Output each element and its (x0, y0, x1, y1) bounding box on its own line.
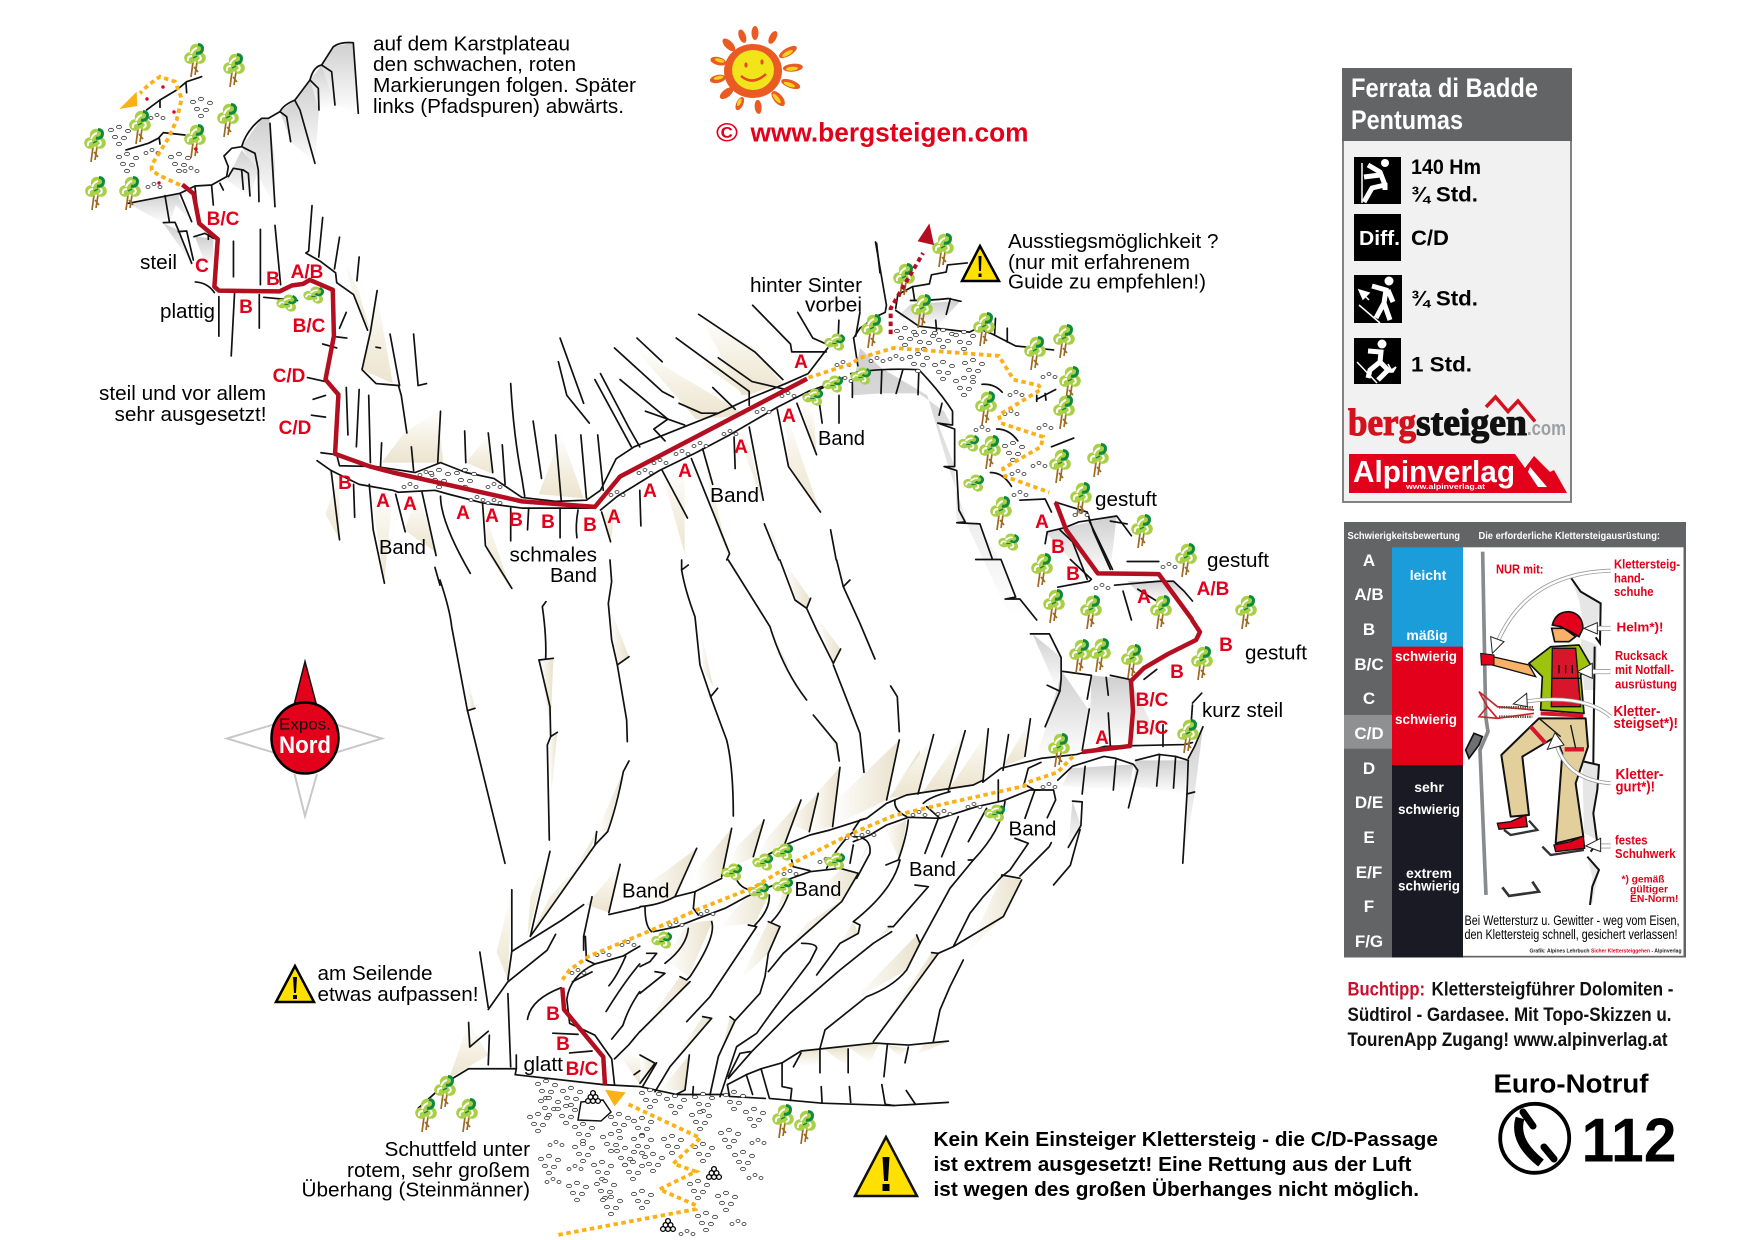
rock line drawing: central wall (440, 560, 899, 863)
difficulty colour bands: schwierig (1398, 801, 1460, 817)
equipment labels: mit Notfall- (1615, 662, 1674, 677)
map labels: gestuft (1095, 489, 1157, 511)
grade scale: B/C (1354, 655, 1384, 674)
text: book tip: Buchtipp: (1348, 980, 1425, 1000)
route difficulty grades: A (782, 406, 796, 427)
route difficulty grades: B (509, 510, 523, 531)
route difficulty grades: A/B (291, 262, 323, 283)
route difficulty grades: B (1066, 564, 1080, 585)
route difficulty grades: A/B (1197, 579, 1229, 600)
map labels: steil und vor allem (99, 383, 266, 405)
map labels: Band (794, 879, 842, 901)
callout: exit possibility: (nur mit erfahrenem (1008, 252, 1190, 274)
map labels: plattig (160, 301, 215, 323)
route difficulty grades: A (456, 503, 470, 524)
map labels: Band (818, 428, 865, 450)
text: ascent values: 140 Hm (1411, 156, 1481, 179)
icon and value: approach time: ¾ Std. (1411, 288, 1478, 310)
compass: exposure north: Nord (279, 732, 331, 759)
equipment labels: ausrüstung (1615, 676, 1677, 692)
rock line drawing: summit spires and karst plateau (126, 42, 358, 263)
route difficulty grades: B (1170, 662, 1184, 683)
difficulty colour bands: extrem (1406, 865, 1452, 881)
text: book tip (1348, 980, 1674, 1051)
map labels: Band (622, 880, 670, 902)
grade scale: A (1363, 551, 1375, 570)
safety note (1464, 913, 1680, 942)
icon and value: difficulty (1354, 214, 1449, 261)
shading: rock faces (128, 43, 1203, 1095)
route difficulty grades: A (1035, 512, 1049, 533)
map labels: Band (379, 537, 426, 559)
map labels: Band (550, 565, 597, 587)
text: book tip: TourenApp Zugang! www.alpinverlag.at (1348, 1030, 1668, 1051)
map labels: gestuft (1245, 642, 1307, 664)
equipment labels: NUR mit: (1496, 562, 1544, 576)
map labels: vorbei (805, 294, 862, 316)
map labels: Band (909, 859, 956, 881)
route difficulty grades: B/C (566, 1059, 599, 1080)
equipment labels: gurt*)! (1616, 778, 1655, 796)
exit option: dark red dotted arrow (891, 223, 934, 334)
rock line drawing: overhang and right wall (727, 634, 1203, 1106)
grade scale: A/B (1354, 585, 1384, 604)
rock line drawing: upper right wall (753, 242, 1192, 620)
safety note: Bei Wettersturz u. Gewitter - weg vom Eisen, (1464, 913, 1680, 928)
callout: rope end warning (276, 963, 478, 1006)
equipment labels: steigset*)! (1614, 715, 1678, 732)
equipment labels: Helm*)! (1616, 620, 1664, 634)
equipment labels (1496, 556, 1680, 905)
icon: smiling sun (709, 26, 803, 114)
map labels: glatt (524, 1054, 563, 1076)
heading: tour title: Pentumas (1351, 105, 1463, 135)
text: scree note: Überhang (Steinmänner) (302, 1180, 530, 1202)
difficulty colour bands: leicht (1410, 567, 1447, 583)
text: book tip: Südtirol - Gardasee. Mit Topo-Skizzen u. (1348, 1005, 1672, 1026)
rock line drawing: lower left wall (418, 845, 730, 1108)
route difficulty grades: B/C (207, 209, 240, 230)
grade scale: B (1363, 620, 1375, 639)
logo: bergsteigen.com: steigen (1416, 402, 1527, 444)
callout: main warning (855, 1129, 1438, 1201)
emergency number (1494, 1070, 1676, 1176)
route difficulty grades: B (556, 1034, 570, 1055)
difficulty colour bands: schwierig (1395, 711, 1457, 727)
text: Karstplateau note: links (Pfadspuren) abwärts. (373, 96, 624, 118)
map labels: steil (140, 252, 177, 274)
text: Karstplateau note: auf dem Karstplateau (373, 34, 570, 56)
route difficulty grades: C/D (273, 366, 305, 387)
grade scale: E/F (1356, 863, 1382, 882)
compass: exposure north: Expos. (279, 716, 331, 734)
approach and descent: dotted yellow paths (119, 77, 1073, 1235)
route difficulty grades: C (195, 256, 209, 277)
map labels: sehr ausgesetzt! (114, 404, 266, 426)
difficulty colour bands (1392, 547, 1463, 958)
compass: exposure north (227, 662, 382, 816)
callout: main warning: Kein Kein Einsteiger Klettersteig - die C/D-Passage (934, 1129, 1438, 1151)
graphic credit: - Alpinverlag (1652, 948, 1682, 954)
map labels: schmales (510, 544, 597, 566)
graphic credit (1530, 948, 1682, 954)
icon: boulder and cairns (Steinmänner) (578, 1091, 721, 1231)
grade scale: D/E (1355, 793, 1383, 812)
text: Karstplateau note: Markierungen folgen. Später (373, 75, 636, 97)
difficulty colour bands: schwierig (1395, 648, 1457, 664)
map labels: Band (1008, 818, 1056, 840)
equipment labels: Schuhwerk (1615, 846, 1676, 861)
route difficulty grades: A (734, 437, 748, 458)
logo: Alpinverlag: www.alpinverlag.at (1405, 484, 1486, 491)
grade scale: E (1363, 828, 1375, 847)
equipment labels: festes (1615, 832, 1648, 848)
grade scale (1344, 551, 1392, 951)
logo: Alpinverlag: Alpinverlag (1353, 454, 1515, 489)
callout: rope end warning: etwas aufpassen! (318, 984, 478, 1006)
equipment labels: gültiger (1630, 884, 1668, 896)
equipment labels: EN-Norm! (1630, 894, 1678, 905)
icon and value: difficulty: Diff. (1359, 228, 1400, 250)
rock line drawing: lower slope bands (640, 780, 1051, 1097)
panel: tour facts (1342, 68, 1572, 502)
route difficulty grades: B/C (1136, 718, 1169, 739)
heading: tour title: Ferrata di Badde (1351, 73, 1538, 103)
route difficulty grades: A (678, 461, 692, 482)
logo: bergsteigen.com: .com (1527, 418, 1566, 440)
map labels: Band (710, 485, 759, 507)
logo: Alpinverlag (1349, 454, 1567, 493)
legend header: Die erforderliche Klettersteigausrüstung: (1478, 530, 1660, 542)
map labels: kurz steil (1202, 700, 1283, 722)
difficulty colour bands: sehr (1414, 779, 1444, 795)
route difficulty grades: B (546, 1004, 560, 1025)
map labels: hinter Sinter (750, 275, 862, 297)
text: scree note (302, 1139, 530, 1202)
route difficulty grades: B (266, 269, 280, 290)
route difficulty grades: A (643, 481, 657, 502)
route difficulty grades: B/C (1136, 690, 1169, 711)
climbing route: red line (182, 185, 1200, 1085)
callout: main warning: ist wegen des großen Überhanges nicht möglich. (934, 1178, 1419, 1201)
icon: telephone (1500, 1104, 1569, 1173)
route difficulty grades: C/D (279, 418, 311, 439)
route difficulty grades: A (485, 506, 499, 527)
callout: main warning: ist extrem ausgesetzt! Eine Rettung aus der Luft (934, 1154, 1412, 1176)
climber illustration (1466, 552, 1611, 905)
icon: ascent (1354, 157, 1401, 204)
text: Karstplateau note: den schwachen, roten (373, 54, 576, 76)
difficulty colour bands: schwierig (1398, 878, 1460, 894)
icon and value: difficulty: C/D (1411, 227, 1449, 250)
route difficulty grades: B/C (293, 316, 326, 337)
emergency number: Euro-Notruf (1494, 1070, 1649, 1098)
grade scale: F/G (1355, 932, 1383, 951)
callout: exit possibility: Guide zu empfehlen!) (1008, 272, 1206, 294)
icon and value: descent time (1354, 338, 1472, 384)
route difficulty grades: B (583, 515, 597, 536)
map labels (99, 252, 1307, 1076)
icon and value: approach time (1354, 275, 1478, 323)
route difficulty grades: A (1137, 587, 1151, 608)
text: Karstplateau note (373, 34, 636, 118)
text: ascent values: ¾ Std. (1411, 184, 1478, 206)
legend header (1348, 530, 1660, 542)
panel: difficulty scale and equipment (1344, 522, 1686, 958)
text: ascent values (1411, 156, 1481, 206)
grade scale: C (1363, 689, 1375, 708)
route difficulty grades: A (1095, 728, 1109, 749)
route difficulty grades: B (239, 297, 253, 318)
text: scree note: Schuttfeld unter (384, 1139, 530, 1161)
equipment labels: Klettersteig- (1614, 556, 1680, 572)
text: book tip: Klettersteigführer Dolomiten - (1432, 980, 1674, 1000)
route difficulty grades: B (541, 512, 555, 533)
callout: exit possibility: Ausstiegsmöglichkeit ? (1008, 231, 1218, 253)
copyright website: www.bergsteigen.com (750, 118, 1028, 148)
legend header: Schwierigkeitsbewertung (1348, 530, 1460, 542)
equipment labels: schuhe (1614, 584, 1654, 599)
text: scree note: rotem, sehr großem (347, 1160, 530, 1182)
icon and value: descent time: 1 Std. (1411, 354, 1472, 376)
equipment labels: Kletter- (1616, 766, 1664, 783)
copyright website: © (716, 118, 738, 148)
safety note: den Klettersteig schnell, gesichert verlassen! (1464, 927, 1678, 942)
route difficulty grades: B (338, 473, 352, 494)
logo: bergsteigen.com (1348, 397, 1566, 444)
route difficulty grades: A (376, 491, 390, 512)
heading: tour title (1342, 68, 1572, 141)
equipment labels: hand- (1614, 570, 1644, 586)
equipment labels: *) gemäß (1622, 874, 1664, 886)
route difficulty grades: B (1219, 635, 1233, 656)
callout: exit possibility (962, 231, 1218, 294)
route difficulty grades: A (607, 507, 621, 528)
route difficulty grades: B (1051, 537, 1065, 558)
equipment labels: Kletter- (1614, 703, 1660, 720)
difficulty colour bands: mäßig (1406, 627, 1448, 643)
grade scale: D (1363, 759, 1375, 778)
graphic credit: Grafik: Alpines Lehrbuch (1530, 948, 1590, 954)
grade scale: F (1364, 897, 1374, 916)
rock line drawing: upper left wall and Band (195, 206, 880, 588)
callout: rope end warning: am Seilende (318, 963, 432, 985)
equipment labels: Rucksack (1615, 648, 1668, 663)
grade scale: C/D (1354, 724, 1384, 743)
graphic credit: Sicher Klettersteiggehen (1591, 948, 1651, 954)
route difficulty grades (195, 209, 1233, 1080)
emergency number: 112 (1582, 1106, 1676, 1176)
scree fields (108, 97, 1177, 1235)
map labels: gestuft (1207, 550, 1269, 572)
route difficulty grades: A (403, 494, 417, 515)
logo: bergsteigen.com: berg (1348, 402, 1416, 444)
route difficulty grades: A (794, 352, 808, 373)
trees (84, 44, 1257, 1144)
